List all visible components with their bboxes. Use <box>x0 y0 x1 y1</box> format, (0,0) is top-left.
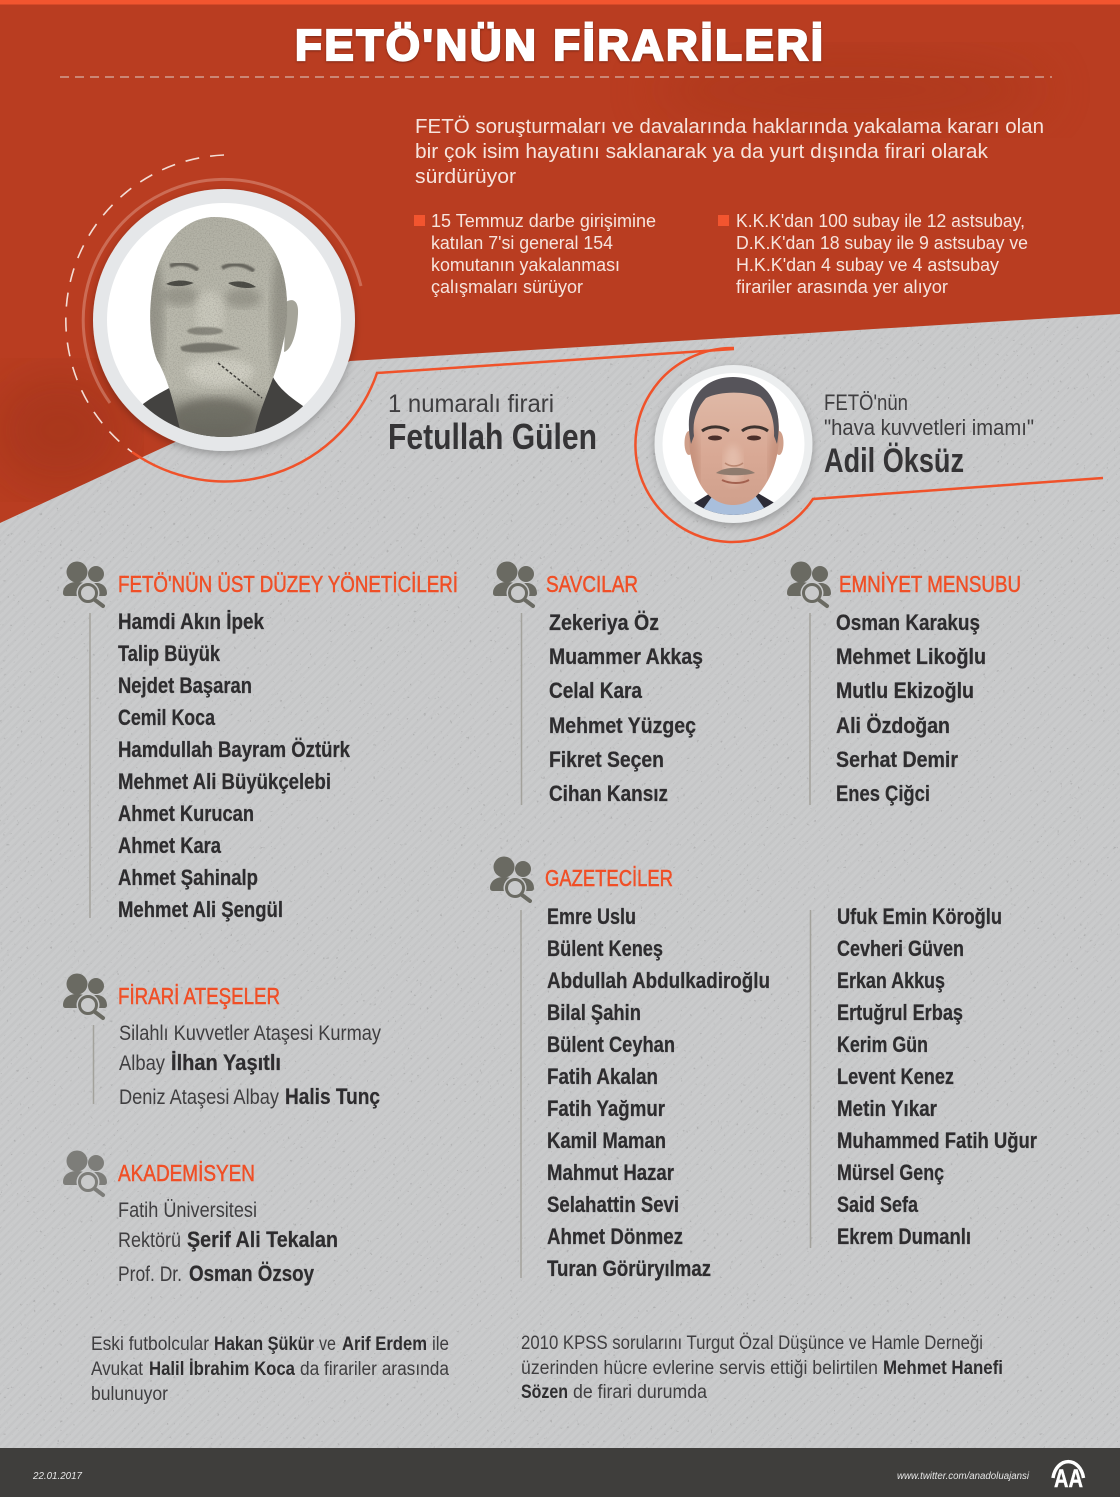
intro text: sürdürüyor <box>415 166 516 188</box>
list of names: Cihan Kansız <box>549 781 668 806</box>
list of names: Enes Çiğci <box>836 781 930 806</box>
bullet: subaylar: firariler arasında yer alıyor <box>736 277 948 297</box>
bullet: subaylar: K.K.K'dan 100 subay ile 12 astsubay, <box>736 211 1025 231</box>
list of names: right column <box>837 904 1037 1249</box>
bullet: komutanlar <box>414 211 656 297</box>
list of names: right column: Ekrem Dumanlı <box>837 1224 971 1249</box>
bullet: subaylar: H.K.K'dan 4 subay ve 4 astsubay <box>736 255 999 275</box>
list of names: right column: Said Sefa <box>837 1192 919 1217</box>
text: ataşeler: Halis Tunç <box>285 1084 380 1109</box>
note: futbolcular: Avukat <box>91 1359 144 1380</box>
text: ataşeler: Deniz Ataşesi Albay <box>119 1086 279 1109</box>
list of names: Hamdi Akın İpek <box>118 609 265 634</box>
note: KPSS: de firari durumda <box>573 1382 707 1403</box>
text: akademisyenler <box>118 1199 338 1286</box>
list of names: Mehmet Ali Büyükçelebi <box>118 769 331 794</box>
list of names: left column: Kamil Maman <box>547 1128 666 1153</box>
list of names: left column: Fatih Yağmur <box>547 1096 665 1121</box>
note: futbolcular: ile <box>432 1334 449 1355</box>
icon: people search <box>490 856 534 901</box>
note: KPSS: Mehmet Hanefi <box>883 1358 1003 1379</box>
list of names: Mehmet Likoğlu <box>836 644 986 669</box>
note: KPSS: 2010 KPSS sorularını Turgut Özal Düşünce ve Hamle Derneği <box>521 1333 983 1354</box>
heading: firari ateşeler: FİRARİ ATEŞELER <box>118 983 280 1009</box>
decorative arc around Öksüz portrait <box>635 348 1103 542</box>
note: futbolcular: Eski futbolcular <box>91 1334 210 1355</box>
list of names: Celal Kara <box>549 678 643 703</box>
heading: emniyet mensubu: EMNİYET MENSUBU <box>839 571 1021 597</box>
label: Adil Öksüz: Adil Öksüz <box>824 442 964 480</box>
icon: people search <box>493 562 537 606</box>
panel: akademisyen <box>63 1150 338 1286</box>
logo: AA: AA <box>1054 1465 1083 1493</box>
bullet: subaylar <box>718 211 1028 297</box>
source url: www.twitter.com/anadoluajansi <box>897 1471 1030 1482</box>
list of names: Fikret Seçen <box>549 747 664 772</box>
list of names: left column: Bülent Keneş <box>547 936 663 961</box>
text: akademisyenler: Rektörü <box>118 1229 181 1252</box>
portrait: Fetullah Gülen <box>93 189 355 451</box>
list of names: left column: Selahattin Sevi <box>547 1192 679 1217</box>
label: Adil Öksüz <box>824 390 1034 480</box>
list of names: Muammer Akkaş <box>549 644 703 669</box>
bullet: komutanlar: çalışmaları sürüyor <box>431 277 583 297</box>
list of names: left column <box>547 904 770 1281</box>
list of names <box>118 609 351 922</box>
intro text: FETÖ soruşturmaları ve davalarında haklarında yakalama kararı olan <box>415 116 1044 138</box>
heading: gazeteciler: GAZETECİLER <box>545 865 673 891</box>
text: akademisyenler: Fatih Üniversitesi <box>118 1199 257 1222</box>
note: futbolcular: Arif Erdem <box>342 1334 427 1355</box>
text: ataşeler: İlhan Yaşıtlı <box>171 1050 281 1075</box>
label: Adil Öksüz: "hava kuvvetleri imamı" <box>824 415 1034 440</box>
note: futbolcular: da firariler arasında <box>300 1359 449 1380</box>
intro text <box>415 116 1044 188</box>
heading: akademisyen: AKADEMİSYEN <box>118 1160 255 1186</box>
panel: red header <box>0 0 1120 523</box>
intro text: bir çok isim hayatını saklanarak ya da yurt dışında firari olarak <box>415 141 989 163</box>
text: ataşeler <box>119 1022 381 1109</box>
label: Fetullah Gülen: 1 numaralı firari <box>388 390 554 418</box>
heading: üst düzey yöneticiler: FETÖ'NÜN ÜST DÜZEY YÖNETİCİLERİ <box>118 571 458 597</box>
note: futbolcular: ve <box>319 1334 336 1355</box>
panel: üst düzey yöneticiler <box>63 562 458 922</box>
note: futbolcular: Hakan Şükür <box>214 1334 315 1355</box>
note: KPSS: Sözen <box>521 1382 568 1403</box>
list of names: Zekeriya Öz <box>549 610 659 635</box>
text: ataşeler: Albay <box>119 1052 165 1075</box>
note: futbolcular: bulunuyor <box>91 1384 169 1405</box>
panel: firari ateşeler <box>63 974 381 1109</box>
heading: savcılar: SAVCILAR <box>546 571 638 597</box>
bullet: komutanlar: katılan 7'si general 154 <box>431 233 613 253</box>
list of names: Ali Özdoğan <box>836 713 950 738</box>
date: 22.01.2017 <box>32 1471 82 1482</box>
list of names: right column: Ufuk Emin Köroğlu <box>837 904 1002 929</box>
list of names: Ahmet Kurucan <box>118 801 254 826</box>
list of names: Osman Karakuş <box>836 610 980 635</box>
title: FETÖ'NÜN FİRARİLERİ <box>295 21 823 70</box>
note: futbolcular <box>91 1334 449 1405</box>
list of names: left column: Bülent Ceyhan <box>547 1032 675 1057</box>
portrait: Adil Öksüz <box>654 365 812 525</box>
list of names: right column: Metin Yıkar <box>837 1096 937 1121</box>
list of names: Ahmet Kara <box>118 833 222 858</box>
decorative arcs around Gülen portrait <box>66 155 734 481</box>
text: akademisyenler: Prof. Dr. <box>118 1263 182 1286</box>
list of names: right column: Kerim Gün <box>837 1032 928 1057</box>
list of names: Nejdet Başaran <box>118 673 252 698</box>
list of names: Serhat Demir <box>836 747 958 772</box>
list of names: left column: Abdullah Abdulkadiroğlu <box>547 968 770 993</box>
list of names <box>836 610 986 806</box>
label: Adil Öksüz: FETÖ'nün <box>824 390 908 415</box>
list of names: right column: Cevheri Güven <box>837 936 964 961</box>
list of names: left column: Bilal Şahin <box>547 1000 641 1025</box>
list of names: left column: Turan Görüryılmaz <box>547 1256 711 1281</box>
icon: people search <box>63 1150 107 1195</box>
icon: people search <box>63 562 107 606</box>
list of names: right column: Ertuğrul Erbaş <box>837 1000 963 1025</box>
panel: emniyet mensubu <box>787 562 1021 806</box>
note: futbolcular: Halil İbrahim Koca <box>149 1359 295 1380</box>
panel: savcılar <box>493 562 703 806</box>
bullet: subaylar: D.K.K'dan 18 subay ile 9 astsubay ve <box>736 233 1028 253</box>
list of names: left column: Fatih Akalan <box>547 1064 658 1089</box>
list of names: right column: Mürsel Genç <box>837 1160 944 1185</box>
panel: gazeteciler <box>490 856 1037 1281</box>
footer <box>0 1448 1120 1497</box>
note: KPSS: üzerinden hücre evlerine servis ettiği belirtilen <box>521 1358 878 1379</box>
list of names: Mehmet Ali Şengül <box>118 897 283 922</box>
text: akademisyenler: Osman Özsoy <box>189 1261 315 1286</box>
bullet: komutanlar: 15 Temmuz darbe girişimine <box>431 211 656 231</box>
icon: people search <box>63 974 107 1018</box>
bullet: komutanlar: komutanın yakalanması <box>431 255 620 275</box>
icon: people search <box>787 562 831 606</box>
list of names: left column: Mahmut Hazar <box>547 1160 674 1185</box>
list of names: right column: Muhammed Fatih Uğur <box>837 1128 1037 1153</box>
list of names <box>549 610 703 806</box>
list of names: right column: Erkan Akkuş <box>837 968 945 993</box>
list of names: Mehmet Yüzgeç <box>549 713 696 738</box>
list of names: right column: Levent Kenez <box>837 1064 954 1089</box>
text: ataşeler: Silahlı Kuvvetler Ataşesi Kurmay <box>119 1022 381 1045</box>
label: Fetullah Gülen <box>388 390 597 457</box>
list of names: left column: Ahmet Dönmez <box>547 1224 683 1249</box>
list of names: Hamdullah Bayram Öztürk <box>118 737 351 762</box>
list of names: Cemil Koca <box>118 705 216 730</box>
list of names: Talip Büyük <box>118 641 221 666</box>
list of names: left column: Emre Uslu <box>547 904 636 929</box>
list of names: Ahmet Şahinalp <box>118 865 258 890</box>
label: Fetullah Gülen: Fetullah Gülen <box>388 416 597 457</box>
note: KPSS <box>521 1333 1003 1403</box>
list of names: Mutlu Ekizoğlu <box>836 678 974 703</box>
text: akademisyenler: Şerif Ali Tekalan <box>187 1227 338 1252</box>
